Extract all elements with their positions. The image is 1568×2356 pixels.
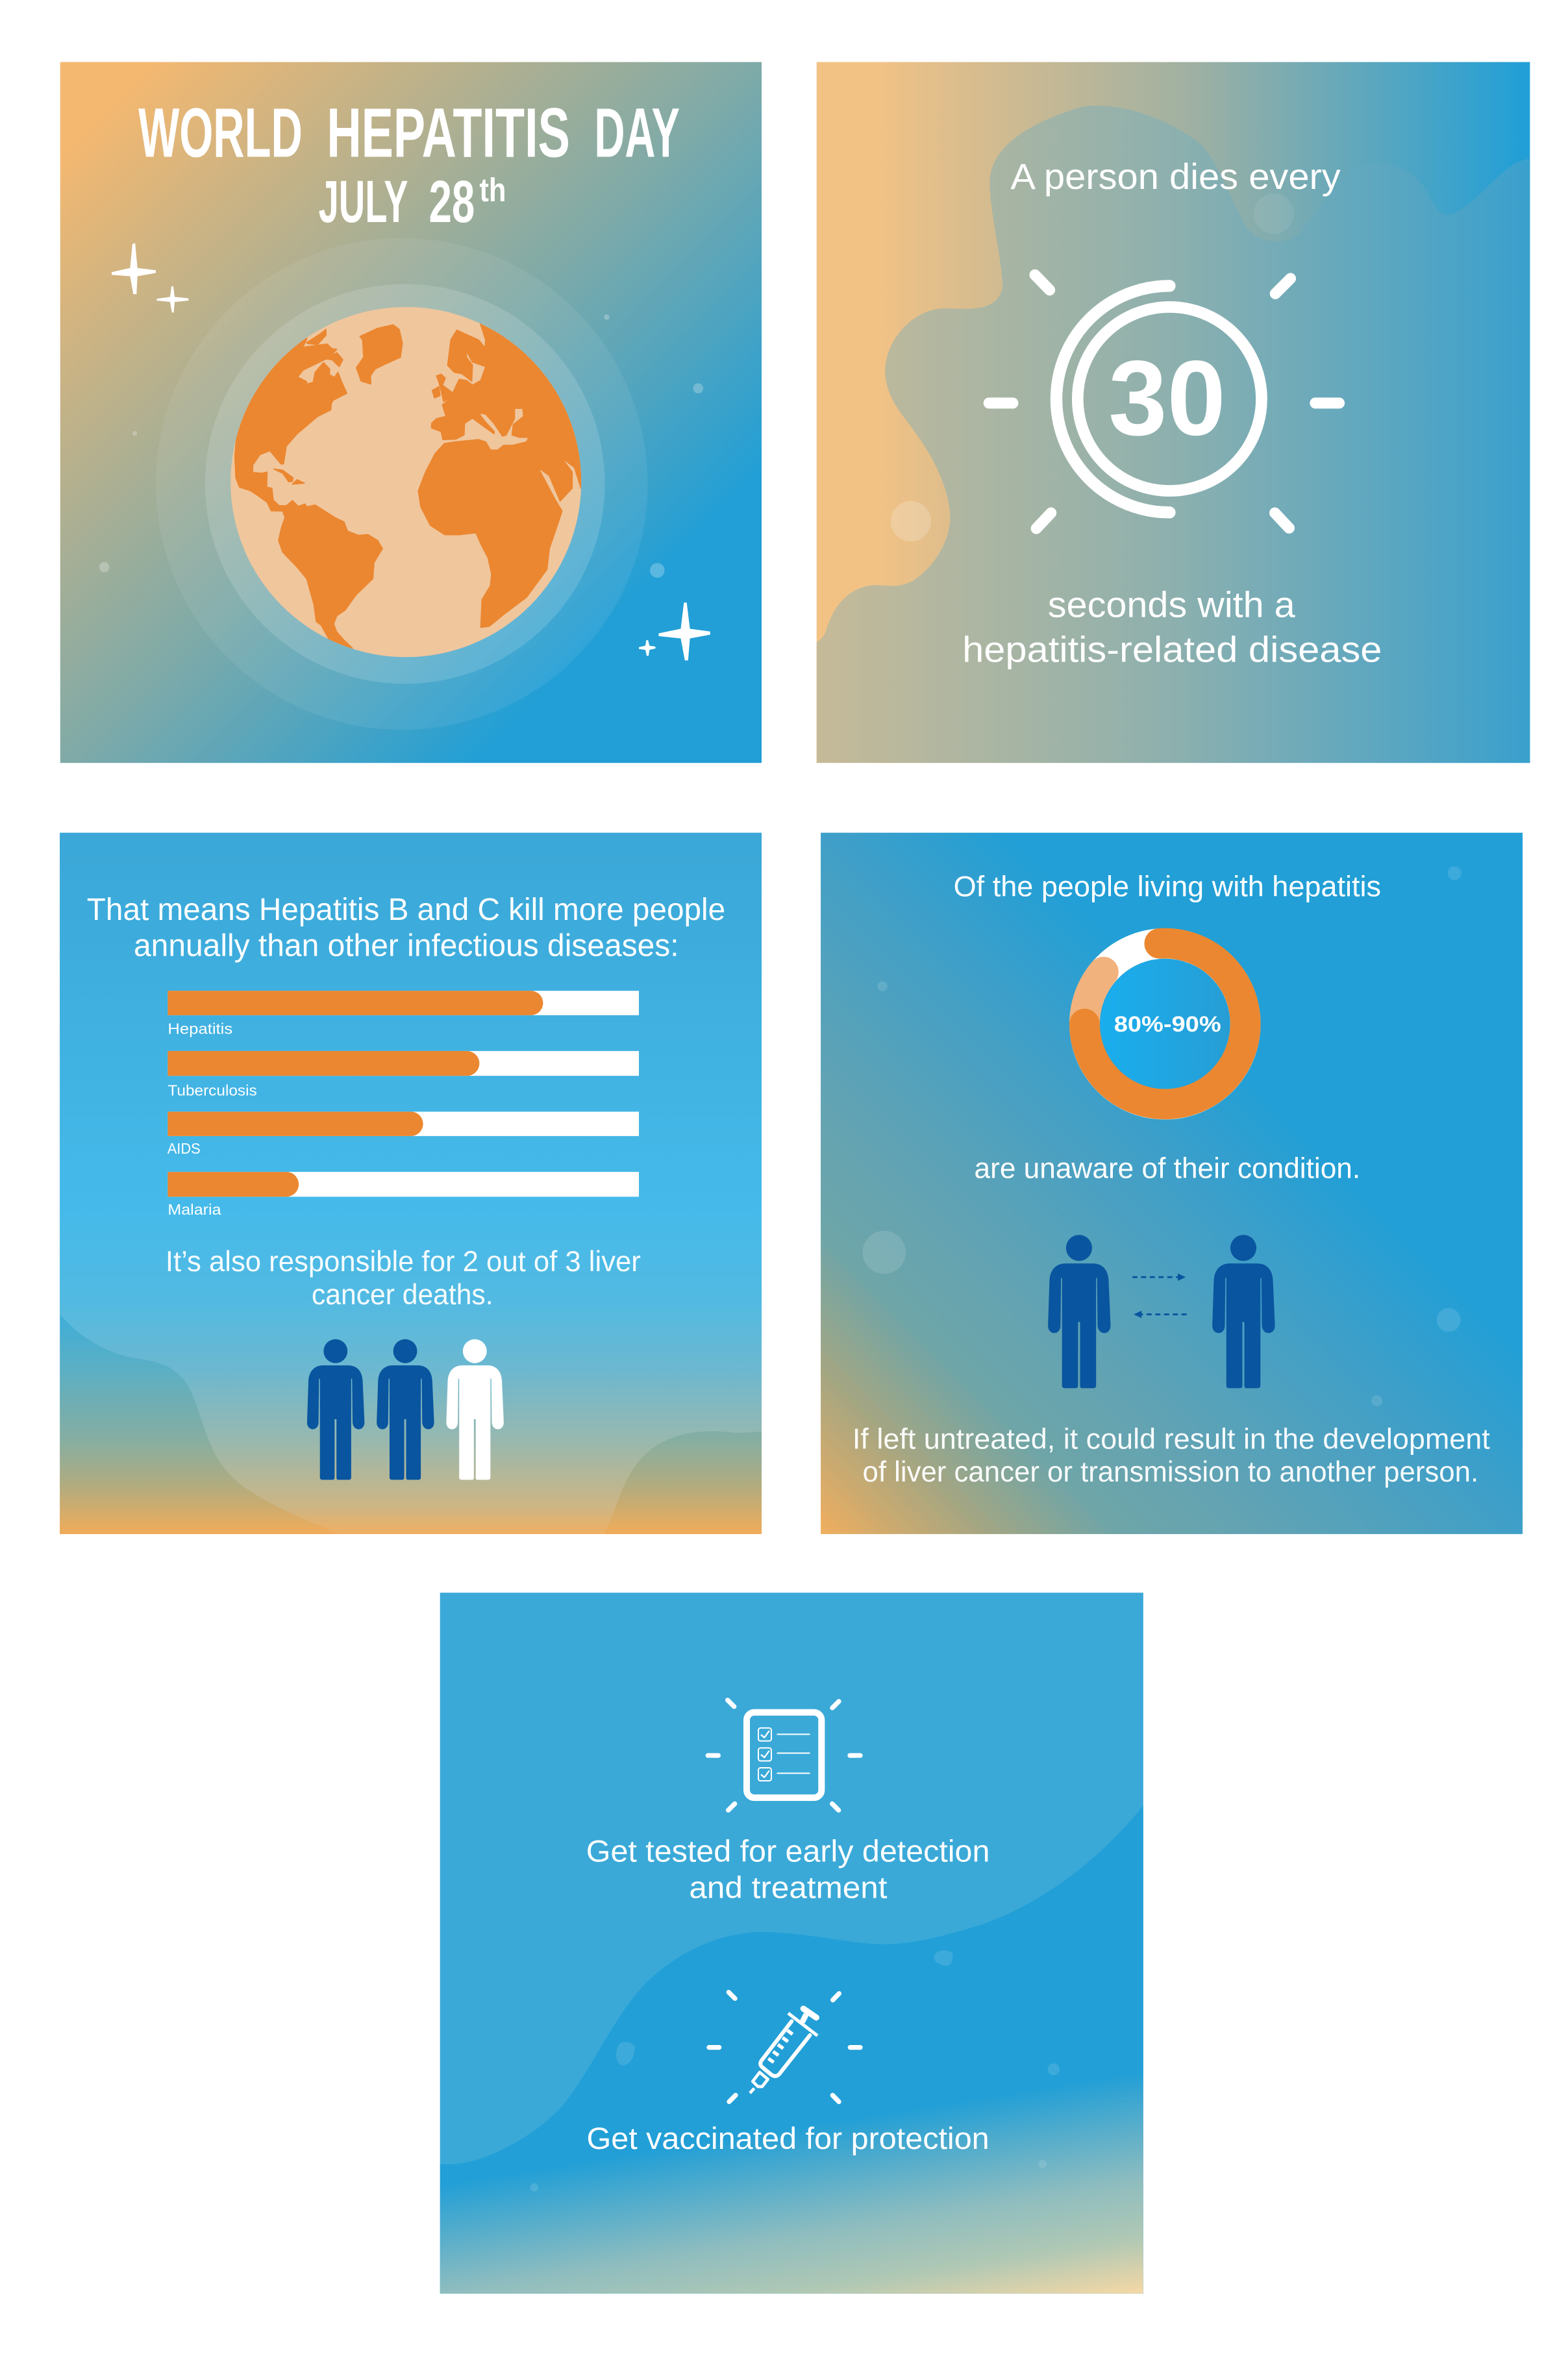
bar chart [168,991,639,1218]
text: a person dies every: A person dies every [1010,156,1341,197]
panel: world hepatitis day [60,62,762,763]
text: liver cancer deaths: It’s also responsible for 2 out of 3 liver [166,1246,641,1278]
date: JULY [319,168,408,235]
arrow: transmission left [1134,1311,1187,1318]
background blob [817,106,1530,763]
bar: hepatitis: Hepatitis [168,1021,232,1037]
date: 28 [429,168,475,235]
bar: hepatitis [168,991,639,1037]
panel: get tested and vaccinated [440,1593,1143,2294]
title: WORLD [138,93,303,171]
icon: person left [1048,1235,1111,1388]
globe halo [156,238,647,730]
bar: malaria: Malaria [168,1201,221,1218]
eurasia and africa [418,323,582,628]
globe [214,305,599,657]
background dots [862,866,1462,1406]
text: seconds with a hepatitis-related disease: hepatitis-related disease [962,629,1382,669]
text: are unaware of their condition: are unaware of their condition. [975,1152,1360,1184]
text: if left untreated: of liver cancer or transmission to another person. [862,1456,1478,1488]
text: seconds with a hepatitis-related disease [962,585,1382,669]
text: seconds with a hepatitis-related disease: seconds with a [1048,585,1295,625]
icon: three people [307,1339,504,1480]
background dots [99,314,703,578]
title: HEPATITIS [327,93,570,171]
text: get tested: Get tested for early detection [586,1834,989,1868]
greenland [356,325,403,384]
baffin island [306,329,326,345]
text: get tested: and treatment [689,1870,888,1905]
donut chart [1084,943,1245,1104]
panel: people living with hepatitis [821,833,1523,1534]
bar: tuberculosis [168,1051,639,1099]
icon: sparkles top left [112,243,188,312]
icon: person right [1212,1235,1275,1388]
text: get tested [586,1834,989,1905]
bar: aids [168,1111,639,1157]
title: DAY [594,93,680,171]
arrow: transmission right [1132,1274,1186,1281]
text: liver cancer deaths: cancer deaths. [312,1279,493,1311]
text: of the people living with hepatitis: Of the people living with hepatitis [954,871,1381,902]
text: if left untreated: If left untreated, it could result in the development [852,1423,1490,1455]
text: liver cancer deaths [166,1246,641,1311]
british isles [432,374,453,401]
text: if left untreated [852,1423,1490,1488]
icon: checklist [708,1700,860,1810]
heading: annually than other infectious diseases: [134,928,679,963]
background wave [440,1805,1143,2294]
icon: sparkles bottom right [639,602,710,660]
heading [87,892,725,963]
background waves [60,1315,762,1534]
panel: thirty seconds [817,62,1530,763]
heading: That means Hepatitis B and C kill more people [87,892,725,927]
bar: malaria [168,1172,639,1218]
number 30: 30 [1108,338,1226,458]
americas [234,338,383,649]
background dots [891,193,1294,541]
cuba [274,469,305,484]
donut value: 80%-90% [1114,1012,1221,1037]
panel: infectious diseases comparison [60,833,762,1534]
bar: tuberculosis: Tuberculosis [168,1082,257,1099]
title [138,93,680,171]
bar: aids: AIDS [168,1140,201,1157]
icon: stopwatch with 30 [989,275,1339,528]
date: th [479,171,506,208]
background specks [530,1950,1060,2192]
text: get vaccinated: Get vaccinated for protection [587,2122,989,2156]
icon: syringe [709,1992,860,2102]
